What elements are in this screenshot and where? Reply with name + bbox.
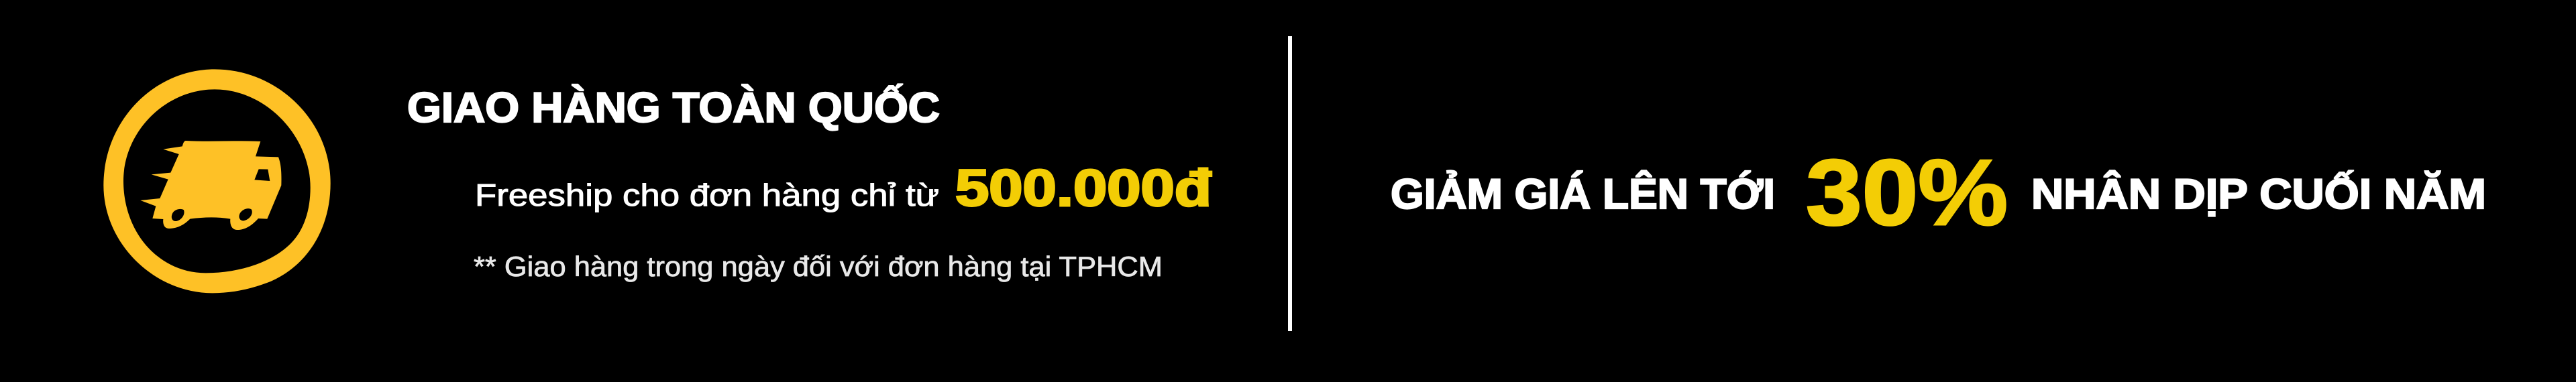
text: freeship condition: Freeship cho đơn hàng chỉ từ <box>475 178 939 212</box>
text: discount lead-in: GIẢM GIÁ LÊN TỚI <box>1391 170 1775 218</box>
text: same-day delivery note: ** Giao hàng trong ngày đối với đơn hàng tại TPHCM <box>474 251 1163 282</box>
icon: delivery truck in ring <box>103 69 331 293</box>
heading: nationwide delivery: GIAO HÀNG TOÀN QUỐC <box>407 84 940 131</box>
text: minimum order amount: 500.000đ <box>955 160 1212 217</box>
panel: year-end discount <box>1391 141 2486 245</box>
text: year-end occasion: NHÂN DỊP CUỐI NĂM <box>2031 170 2486 218</box>
icon: ring <box>103 69 331 293</box>
panel: free shipping <box>103 69 1212 293</box>
icon: truck <box>140 141 281 230</box>
text: discount percent: 30% <box>1806 141 2008 245</box>
